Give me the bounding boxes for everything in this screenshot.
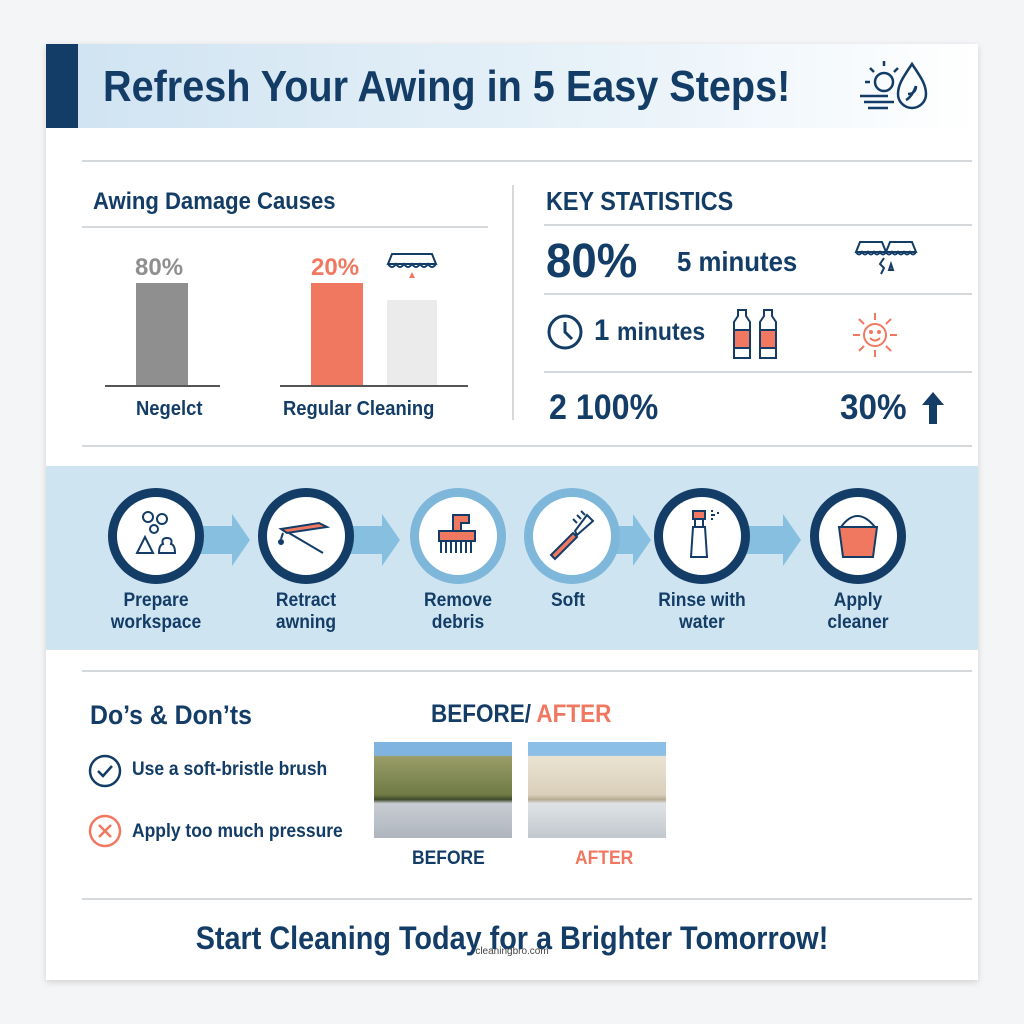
icon: sun and leaf drop bbox=[860, 61, 928, 110]
step labels: Prepare bbox=[123, 590, 189, 611]
stat row 3: 2 100% bbox=[549, 388, 658, 427]
heading: Do’s & Don’ts bbox=[90, 700, 252, 730]
arrows bbox=[200, 514, 801, 566]
panel: key statistics: 30% bbox=[840, 388, 907, 427]
panel: key statistics bbox=[544, 186, 972, 427]
panel: steps band: Apply bbox=[834, 590, 882, 611]
panel: steps band: Rinse with bbox=[658, 590, 746, 611]
panel: steps band: awning bbox=[276, 612, 336, 633]
bar chart bbox=[105, 253, 468, 387]
step 1 prepare bbox=[108, 488, 204, 584]
panel: before after: AFTER bbox=[575, 848, 633, 869]
heading: KEY STATISTICS bbox=[546, 186, 733, 216]
title: Refresh Your Awing in 5 Easy Steps! bbox=[103, 62, 790, 111]
panel: steps band: water bbox=[679, 612, 725, 633]
panel: do's and don'ts: Use a soft-bristle brush bbox=[132, 759, 327, 780]
after image bbox=[528, 742, 666, 838]
panel: steps band: Retract bbox=[276, 590, 336, 611]
panel: steps band: Soft bbox=[551, 590, 585, 611]
heading: Awing Damage Causes bbox=[93, 188, 336, 215]
panel: steps band: cleaner bbox=[827, 612, 889, 633]
panel: steps band: debris bbox=[432, 612, 484, 633]
step 6 apply cleaner bbox=[810, 488, 906, 584]
panel: awing damage causes: Regular Cleaning bbox=[283, 398, 434, 420]
panel: before after: BEFORE bbox=[412, 848, 485, 869]
heading: BEFORE/ AFTER bbox=[431, 700, 611, 728]
header accent bar bbox=[46, 44, 78, 128]
before image bbox=[374, 742, 512, 838]
watermark: cleaningbro.com bbox=[475, 946, 549, 957]
dont item bbox=[88, 814, 122, 848]
panel: key statistics: 5 minutes bbox=[677, 246, 797, 277]
step 5 rinse bbox=[654, 488, 750, 584]
footer tagline: Start Cleaning Today for a Brighter Tomorrow! bbox=[196, 920, 828, 956]
icon: up arrow bbox=[922, 392, 944, 424]
bar chart: 80% bbox=[135, 254, 183, 281]
bar chart: 20% bbox=[311, 254, 359, 281]
do item bbox=[88, 754, 122, 788]
panel: steps band: Remove bbox=[424, 590, 492, 611]
panel: awing damage causes bbox=[82, 188, 488, 420]
step 4 soft bbox=[524, 488, 620, 584]
header banner bbox=[46, 44, 978, 128]
stat row 2 bbox=[548, 314, 582, 350]
step labels: workspace bbox=[111, 612, 201, 633]
step labels bbox=[110, 590, 201, 633]
step 3 remove debris bbox=[410, 488, 506, 584]
panel: do's and don'ts bbox=[88, 700, 343, 848]
panel: before after bbox=[374, 700, 666, 869]
panel: key statistics: 1 minutes bbox=[594, 314, 705, 347]
panel: do's and don'ts: Apply too much pressure bbox=[132, 821, 343, 842]
bar labels: Negelct bbox=[136, 398, 202, 420]
stat row 1: 80% bbox=[546, 235, 637, 288]
panel: steps band bbox=[46, 466, 978, 650]
step 2 retract bbox=[258, 488, 354, 584]
